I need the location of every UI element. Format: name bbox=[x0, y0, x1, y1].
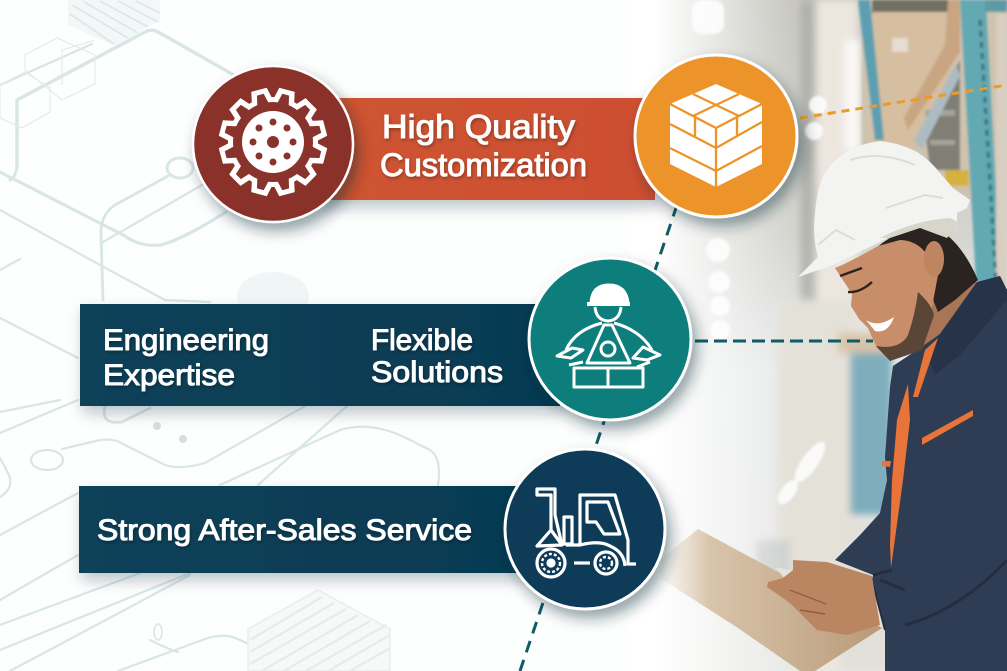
icon: forklift badge bbox=[505, 449, 665, 609]
helmet bbox=[798, 141, 970, 277]
hand bbox=[767, 560, 880, 635]
icon: stacked boxes badge bbox=[635, 55, 797, 217]
small dots bbox=[153, 422, 187, 443]
finger creases bbox=[790, 590, 826, 614]
orange placket strip bbox=[890, 384, 910, 568]
orange collar strip bbox=[913, 338, 938, 397]
worker photo bbox=[660, 141, 1007, 671]
label: strong after-sales service: Strong After-Sales Service bbox=[97, 514, 472, 547]
eye and brow bbox=[840, 268, 872, 292]
label: flexible solutions: Flexible bbox=[371, 324, 473, 357]
label: flexible solutions bbox=[371, 324, 503, 389]
ear bbox=[924, 241, 944, 277]
cuff edge bbox=[872, 580, 885, 630]
helmet ridges bbox=[818, 156, 943, 245]
label: engineering expertise: Engineering bbox=[103, 324, 269, 357]
small hem stripe bbox=[882, 461, 891, 467]
panel: strong after-sales service bbox=[79, 449, 665, 609]
teal dashed vertical connector bbox=[520, 205, 677, 671]
hexagon pattern top left bbox=[0, 38, 95, 128]
heading: high quality customization: High Quality bbox=[382, 108, 576, 145]
striped hexagon bottom bbox=[248, 590, 390, 671]
smile bbox=[866, 317, 894, 331]
blurred warehouse photo background bbox=[630, 0, 1007, 671]
sleeve fold bbox=[873, 560, 1007, 625]
striped hexagon top bbox=[68, 0, 160, 46]
collar bbox=[925, 276, 1007, 375]
icon: gear badge bbox=[193, 66, 353, 222]
navy banner bbox=[79, 486, 530, 573]
label: flexible solutions: Solutions bbox=[371, 356, 503, 389]
heading: high quality customization bbox=[380, 108, 587, 183]
heading: high quality customization: Customization bbox=[380, 147, 587, 183]
hair bbox=[876, 227, 978, 312]
paper sheet bbox=[775, 567, 820, 585]
gear glyph bbox=[207, 76, 339, 208]
icon: worker with box badge bbox=[529, 258, 691, 420]
neck bbox=[922, 280, 977, 352]
helmet suspension band bbox=[880, 218, 958, 238]
panel: high quality customization bbox=[193, 55, 797, 222]
chest pocket stripe bbox=[922, 410, 973, 445]
label: engineering expertise bbox=[103, 324, 269, 392]
faint gear mark behind navy bar bbox=[237, 272, 309, 320]
face bbox=[835, 240, 938, 360]
panel: engineering expertise and flexible solutions bbox=[80, 258, 691, 420]
circuit line background pattern bbox=[0, 30, 439, 671]
orange dashed connector bbox=[800, 85, 1007, 118]
teal dashed horizontal connector bbox=[695, 340, 873, 342]
label: engineering expertise: Expertise bbox=[103, 359, 235, 392]
clipboard bbox=[660, 529, 882, 671]
red banner bbox=[320, 98, 655, 200]
navy banner bbox=[80, 304, 560, 406]
jacket bbox=[835, 276, 1007, 671]
beard bbox=[876, 292, 934, 361]
